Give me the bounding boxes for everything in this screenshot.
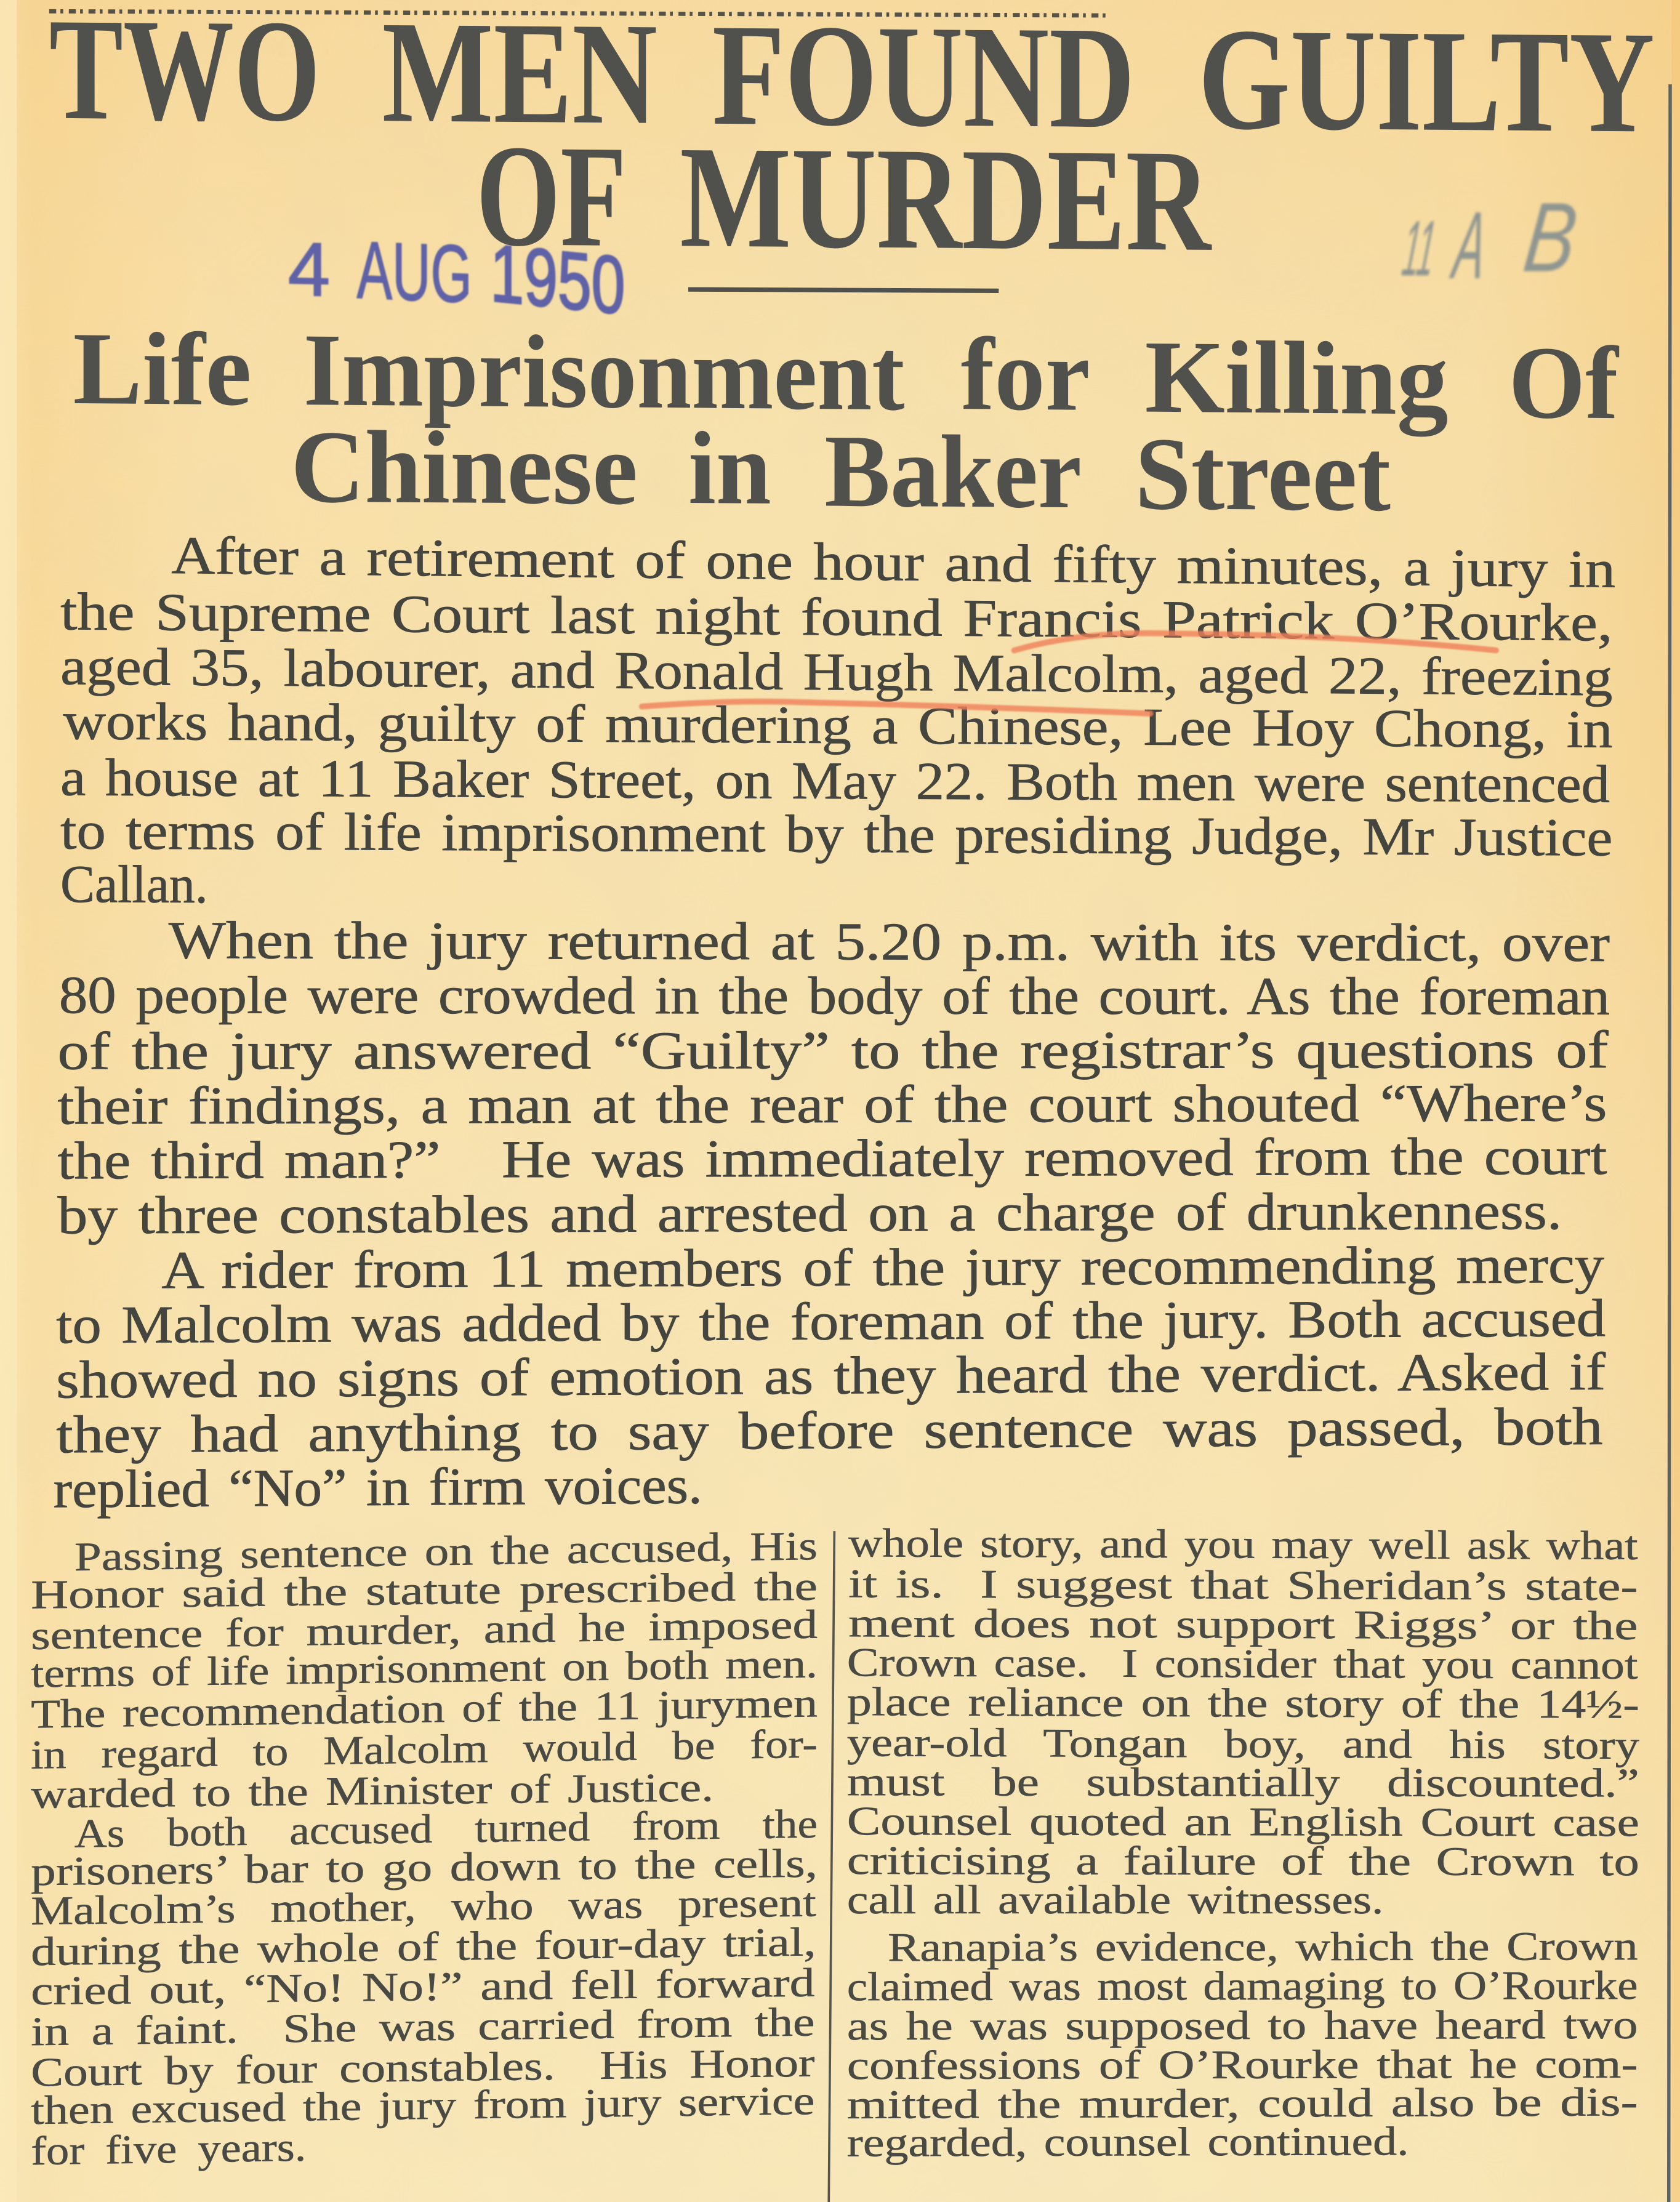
subheading: Killing xyxy=(1145,320,1449,438)
third paragraph xyxy=(54,1236,1606,1520)
date stamp: 1950 xyxy=(490,228,625,332)
left column text: during the whole of the four-day trial, xyxy=(31,1920,816,1975)
second paragraph: by three constables and arrested on a charge of drunkenness. xyxy=(58,1183,1562,1246)
date stamp: AUG xyxy=(357,225,472,321)
lead paragraph: Callan. xyxy=(60,856,208,915)
second paragraph: 80 people were crowded in the body of the court. As the foreman xyxy=(59,966,1610,1027)
left column text: for five years. xyxy=(31,2126,306,2174)
subheading: for xyxy=(961,318,1090,434)
subheading: in xyxy=(688,412,771,528)
lead paragraph: After a retirement of one hour and fifty minutes, a jury in xyxy=(171,527,1615,600)
second paragraph: the third man?” He was immediately removed from the court xyxy=(58,1128,1607,1191)
lead paragraph: the Supreme Court last night found Francis Patrick O’Rourke, xyxy=(60,583,1612,653)
pencil note xyxy=(1399,183,1583,299)
right column text: Ranapia’s evidence, which the Crown xyxy=(888,1924,1639,1971)
third paragraph: replied “No” in firm voices. xyxy=(54,1457,702,1520)
right column text: whole story, and you may well ask what xyxy=(848,1521,1638,1569)
left column text: prisoners’ bar to go down to the cells, xyxy=(31,1841,818,1895)
date stamp xyxy=(288,225,625,332)
left column text: Honor said the statute prescribed the xyxy=(31,1565,818,1618)
second paragraph: of the jury answered “Guilty” to the registrar’s questions of xyxy=(58,1021,1609,1082)
right column text xyxy=(847,1521,1640,2166)
left column text: Malcolm’s mother, who was present xyxy=(31,1881,816,1934)
third paragraph: showed no signs of emotion as they heard the verdict. Asked if xyxy=(56,1343,1606,1410)
pencil note: 11 xyxy=(1399,204,1440,292)
right edge rule xyxy=(1669,84,1670,2202)
left column text: in regard to Malcolm would be for- xyxy=(31,1722,818,1778)
left column text: The recommendation of the 11 jurymen xyxy=(31,1681,818,1738)
right column text: claimed was most damaging to O’Rourke xyxy=(847,1964,1638,2010)
right column text: must be substantially discounted.” xyxy=(847,1760,1639,1806)
right column text: it is. I suggest that Sheridan’s state- xyxy=(848,1562,1638,1610)
third paragraph: they had anything to say before sentence was passed, both xyxy=(56,1398,1603,1465)
right column text: place reliance on the story of the 14½- xyxy=(847,1680,1639,1728)
right column text: year-old Tongan boy, and his story xyxy=(847,1721,1640,1769)
second paragraph: When the jury returned at 5.20 p.m. with its verdict, over xyxy=(169,912,1610,973)
lead paragraph xyxy=(60,527,1615,915)
red pencil underlines xyxy=(642,633,1496,713)
right column text: regarded, counsel continued. xyxy=(847,2120,1409,2166)
right column text: mitted the murder, could also be dis- xyxy=(847,2080,1638,2128)
subheading xyxy=(73,312,1620,534)
right column text: criticising a failure of the Crown to xyxy=(847,1839,1639,1885)
third paragraph: A rider from 11 members of the jury recommending mercy xyxy=(161,1236,1604,1301)
right column text: ment does not support Riggs’ or the xyxy=(848,1601,1638,1649)
lead paragraph: works hand, guilty of murdering a Chinese, Lee Hoy Chong, in xyxy=(63,693,1612,760)
main headline xyxy=(49,0,1655,282)
main headline: MURDER xyxy=(680,116,1213,282)
left column text: warded to the Minister of Justice. xyxy=(31,1766,713,1818)
subheading: Of xyxy=(1509,326,1620,442)
third paragraph: to Malcolm was added by the foreman of the jury. Both accused xyxy=(56,1290,1606,1356)
left column text: cried out, “No! No!” and fell forward xyxy=(31,1961,816,2014)
subheading: Street xyxy=(1135,417,1391,534)
second paragraph: their findings, a man at the rear of the court shouted “Where’s xyxy=(58,1074,1607,1136)
left column text: Passing sentence on the accused, His xyxy=(74,1524,818,1580)
main headline: OF xyxy=(476,115,627,278)
subheading: Chinese xyxy=(291,410,638,528)
subheading: Life xyxy=(73,312,251,428)
lead paragraph: to terms of life imprisonment by the presiding Judge, Mr Justice xyxy=(60,802,1612,868)
right column text: as he was supposed to have heard two xyxy=(847,2003,1638,2049)
subheading: Baker xyxy=(824,414,1082,531)
column divider xyxy=(829,1531,834,2202)
lead paragraph: a house at 11 Baker Street, on May 22. Both men were sentenced xyxy=(60,749,1610,814)
left column text: terms of life imprisonment on both men. xyxy=(31,1642,818,1697)
left column text: in a faint. She was carried from the xyxy=(31,2000,814,2055)
left column text: As both accused turned from the xyxy=(74,1802,818,1857)
subheading: Imprisonment xyxy=(303,313,905,433)
right column text: Crown case. I consider that you cannot xyxy=(847,1641,1638,1689)
lead paragraph: aged 35, labourer, and Ronald Hugh Malcolm, aged 22, freezing xyxy=(60,638,1612,708)
right column text: confessions of O’Rourke that he com- xyxy=(847,2043,1638,2089)
second paragraph xyxy=(58,912,1610,1246)
right column text: call all available witnesses. xyxy=(847,1878,1384,1923)
pencil note: B xyxy=(1519,183,1583,292)
headline divider xyxy=(688,289,999,291)
right column text: Counsel quoted an English Court case xyxy=(847,1799,1639,1846)
date stamp: 4 xyxy=(288,228,330,313)
left column text xyxy=(31,1524,818,2174)
left column text: Court by four constables. His Honor xyxy=(31,2041,815,2096)
torn top rule from previous clipping xyxy=(49,11,1110,15)
pencil note: A xyxy=(1446,193,1492,299)
left column text: sentence for murder, and he imposed xyxy=(31,1603,818,1659)
left column text: then excused the jury from jury service xyxy=(31,2079,814,2134)
